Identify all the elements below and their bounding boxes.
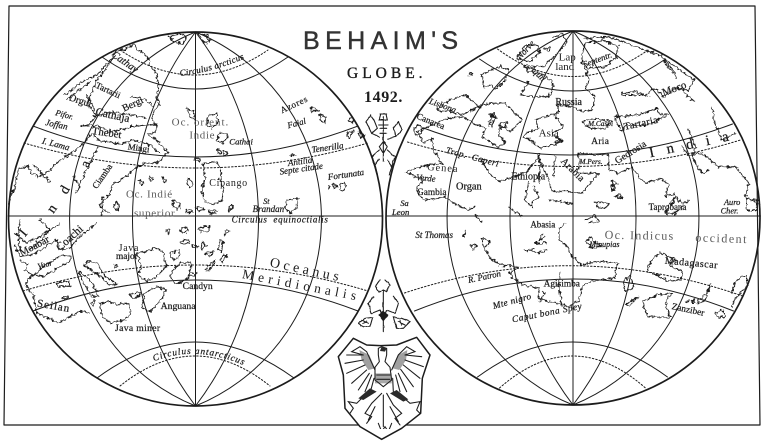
panel: left hemisphere: Coachi bbox=[54, 223, 86, 254]
title: BEHAIM'S bbox=[303, 27, 464, 55]
right globe place labels: Lisbona bbox=[427, 95, 458, 115]
right globe place labels: Aquil bbox=[527, 62, 548, 84]
left globe place labels: a bbox=[78, 158, 94, 170]
left globe place labels: Mingi bbox=[127, 141, 151, 154]
left globe place labels: Oc. Indié bbox=[126, 188, 173, 200]
right globe place labels: Russia bbox=[555, 97, 583, 108]
subtitle: globe: GLOBE. bbox=[347, 65, 427, 82]
right globe place labels: Canarea bbox=[415, 111, 446, 131]
panel: left hemisphere: Moabar bbox=[18, 234, 52, 259]
right globe place labels: land bbox=[555, 61, 575, 73]
right globe place labels: Asia bbox=[539, 128, 559, 140]
panel: left hemisphere: Candyn bbox=[183, 281, 213, 292]
left globe place labels: Bergi bbox=[121, 95, 145, 114]
right globe place labels: Gedrosia bbox=[613, 138, 649, 167]
right globe place labels: M.Caspi bbox=[587, 119, 613, 128]
panel: right hemisphere: Minupias bbox=[588, 240, 619, 249]
right globe place labels: Organ bbox=[456, 181, 482, 192]
left globe place labels: I. Lama bbox=[40, 135, 71, 153]
left globe place labels: Azores bbox=[279, 94, 310, 115]
right globe place labels: Leon bbox=[391, 207, 409, 217]
right globe place labels: Sa bbox=[400, 199, 409, 208]
right globe place labels: Septentr. bbox=[582, 50, 613, 69]
right globe place labels: Verde bbox=[416, 172, 436, 184]
panel: left hemisphere: Oceanus bbox=[268, 256, 344, 286]
panel: right hemisphere: Zanziber bbox=[671, 302, 706, 319]
right globe outline bbox=[386, 31, 760, 405]
right globe place labels: Gambia bbox=[417, 188, 447, 198]
left globe place labels: Cathai bbox=[229, 137, 253, 147]
panel: left hemisphere: Vaar bbox=[37, 258, 54, 271]
left globe place labels: Circulus equinoctialis bbox=[232, 215, 329, 225]
right globe place labels: Tartaria bbox=[623, 115, 659, 133]
left globe place labels: Indie bbox=[189, 129, 215, 141]
right globe place labels: Cher. bbox=[721, 206, 738, 215]
shield outline bbox=[338, 337, 430, 439]
left globe place labels: Orgui bbox=[67, 92, 93, 110]
left globe place labels: Fortunata bbox=[326, 167, 365, 182]
panel: right hemisphere: Mte nigro bbox=[491, 292, 533, 312]
left globe place labels bbox=[17, 49, 398, 240]
left globe place labels: Brandan bbox=[253, 204, 285, 214]
left globe place labels: superior bbox=[134, 208, 175, 220]
left globe place labels: Pifor. bbox=[54, 108, 74, 122]
right globe place labels: M.Pers. bbox=[578, 157, 603, 166]
left globe place labels: Cathay bbox=[109, 49, 140, 76]
left globe place labels: Septe citade bbox=[279, 161, 323, 177]
panel: right hemisphere: R. Patron bbox=[466, 268, 502, 285]
left globe place labels: Antilia bbox=[286, 155, 313, 168]
panel: right hemisphere: Madagascar bbox=[664, 256, 719, 271]
right globe place labels: Genea bbox=[427, 162, 459, 175]
right globe place labels bbox=[391, 38, 743, 217]
date: 1492: 1492. bbox=[364, 89, 403, 106]
panel: left hemisphere: Anguana bbox=[161, 301, 196, 312]
left globe coastlines bbox=[8, 33, 364, 323]
panel: left hemisphere: Meridionalis bbox=[241, 266, 362, 304]
panel: right hemisphere bbox=[386, 31, 760, 405]
coat of arms shield with eagle bbox=[338, 337, 430, 439]
right globe place labels: Arabia bbox=[558, 156, 587, 185]
left globe place labels: Tenerilla bbox=[311, 140, 345, 155]
right globe place labels: Lap bbox=[559, 52, 576, 64]
panel: left hemisphere: major bbox=[116, 252, 139, 262]
left globe place labels: d bbox=[57, 183, 74, 197]
right globe place labels: Auro bbox=[723, 198, 740, 207]
panel: left hemisphere bbox=[8, 31, 384, 407]
right globe coastlines bbox=[405, 33, 759, 318]
left globe place labels: Cathaja bbox=[94, 106, 131, 125]
right globe place labels: Aria bbox=[591, 137, 610, 147]
right globe place labels: Moco bbox=[661, 80, 688, 99]
left globe place labels: Faial bbox=[285, 116, 308, 131]
right globe place labels: India bbox=[648, 126, 743, 161]
panel: right hemisphere: occident bbox=[695, 230, 748, 246]
eagle bbox=[345, 347, 423, 432]
panel: right hemisphere: St Thomas bbox=[415, 230, 454, 240]
right globe place labels: Norve bbox=[514, 38, 537, 62]
panel: left hemisphere: Java bbox=[119, 243, 139, 254]
ornament: upper floral bbox=[366, 114, 402, 175]
left globe outline bbox=[8, 32, 382, 406]
right globe place labels: Trop. Caperi bbox=[445, 145, 500, 169]
right globe place labels: Taprobana bbox=[649, 202, 686, 212]
panel: left hemisphere: Java miner bbox=[115, 323, 161, 334]
left globe place labels: Joffan bbox=[45, 117, 69, 132]
panel: left hemisphere: Circulus antarcticus bbox=[153, 348, 245, 365]
panel: right hemisphere: Abasia bbox=[530, 220, 555, 230]
right globe place labels: Ethiopia bbox=[511, 171, 546, 182]
panel: right hemisphere: Oc. Indicus bbox=[605, 228, 675, 243]
left globe place labels: Thebet bbox=[91, 126, 122, 141]
left globe place labels: Oc. orient. bbox=[172, 116, 229, 128]
right globe graticule bbox=[386, 31, 760, 405]
panel: right hemisphere: Agisimba bbox=[544, 279, 581, 289]
panel: left hemisphere: Seilan bbox=[36, 297, 71, 315]
left globe place labels: I bbox=[17, 226, 31, 240]
left globe place labels: Ciamba bbox=[90, 162, 114, 190]
left globe place labels: Tartarii bbox=[94, 80, 123, 100]
left globe place labels: n bbox=[44, 202, 61, 216]
left globe graticule bbox=[8, 32, 383, 406]
left globe place labels: Cipango bbox=[209, 178, 248, 189]
left globe place labels: Circulus arcticus bbox=[180, 54, 244, 76]
panel: right hemisphere: Caput bona Spey bbox=[511, 302, 584, 325]
left globe place labels: St bbox=[263, 197, 270, 206]
ornament: lower floral bbox=[358, 280, 410, 332]
